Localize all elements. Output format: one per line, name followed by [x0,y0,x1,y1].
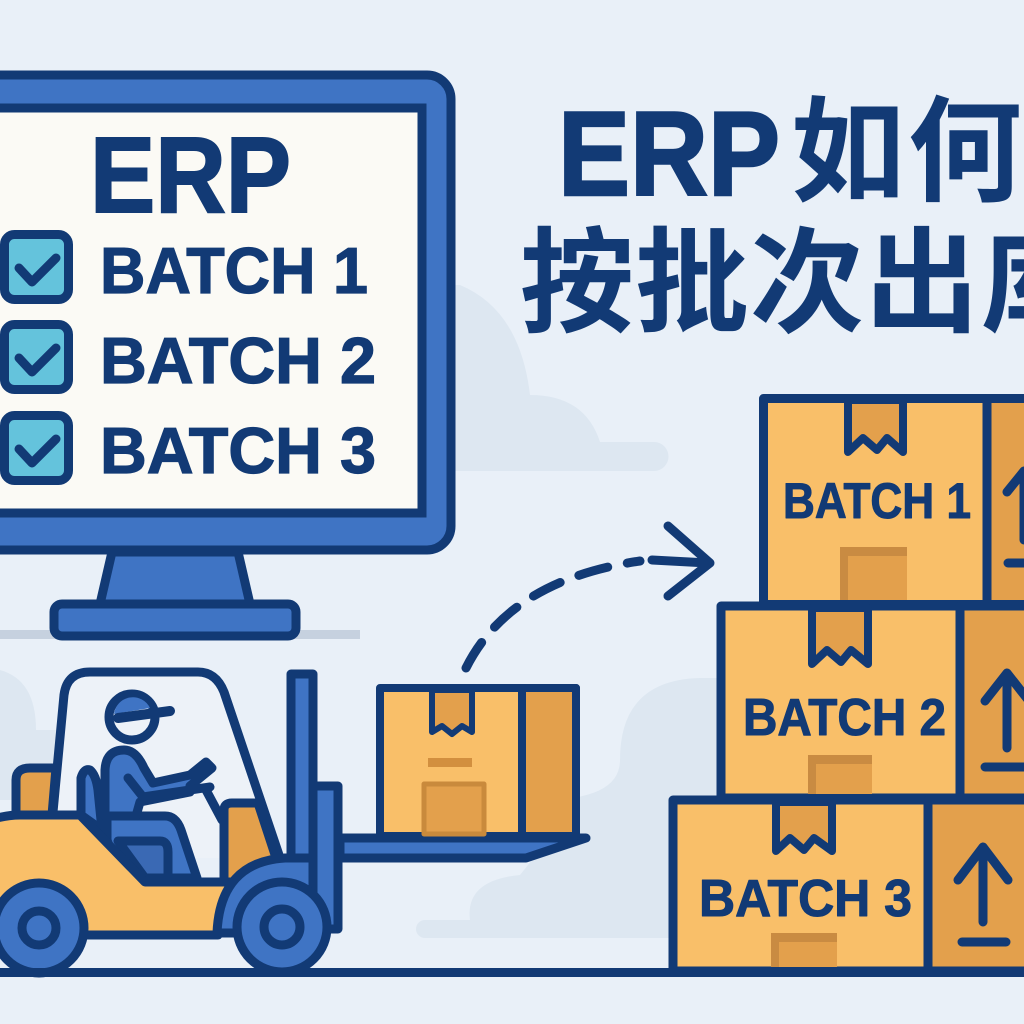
batch 3 box: BATCH 3 [699,870,912,928]
batch 3 label: BATCH 3 [100,414,376,487]
monitor stand [54,552,296,636]
checkbox 2 [4,324,68,390]
monitor [0,75,451,639]
rear block [16,768,56,815]
batch 2 box [721,606,1024,798]
background clouds [0,285,800,938]
title: 如何 [791,90,1022,217]
front wheel [237,882,327,972]
forklift [0,672,586,973]
checkbox 3 [4,416,68,480]
rear wheel [0,883,84,973]
title [520,87,1024,348]
fork [340,838,586,858]
title: ERP [558,87,780,221]
ground line [0,968,1024,977]
batch 1 box [764,398,1024,604]
steering column [206,790,222,820]
front block [224,803,280,885]
driver torso and arms [105,750,212,816]
batch checklist [4,234,376,487]
driver legs [107,816,197,878]
batch 3 box [673,800,1024,971]
carried box [380,688,576,836]
driver [105,694,212,878]
screen heading: ERP [90,114,291,235]
batch 1 box: BATCH 1 [783,473,971,529]
fender [217,858,313,933]
batch 1 label: BATCH 1 [100,234,368,307]
checkbox 1 [4,234,68,300]
driver head [109,694,170,740]
forklift body [0,815,235,935]
dashed arrow [466,526,710,668]
monitor screen [0,108,422,513]
cab frame [53,672,280,858]
monitor frame [0,75,451,550]
seat back [81,770,102,830]
desk shadow [0,630,360,639]
box stack [673,398,1024,971]
mast [291,674,338,929]
batch 2 box: BATCH 2 [743,689,946,747]
batch 2 label: BATCH 2 [100,324,376,397]
